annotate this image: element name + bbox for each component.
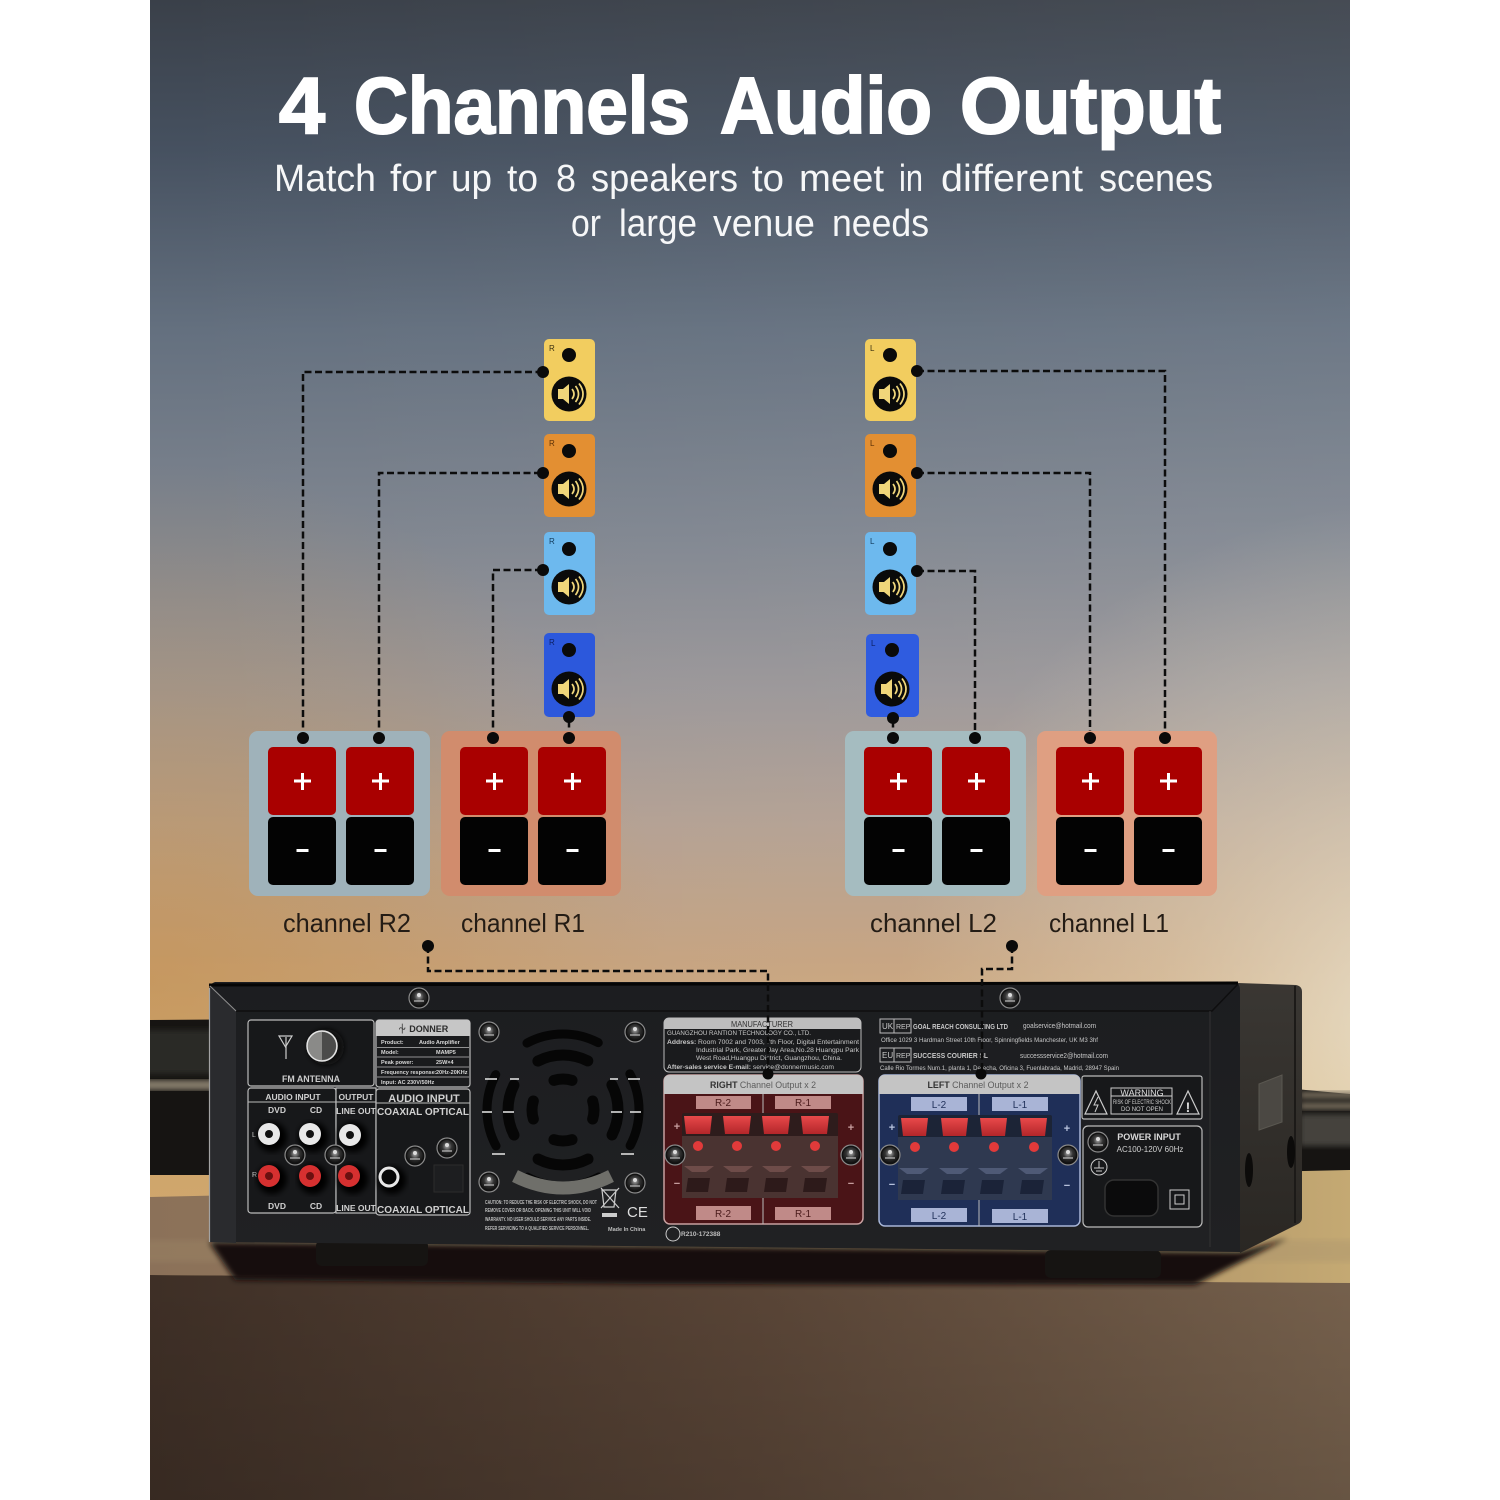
manufacturer label: After-sales service E-mail: service@donnermusic.com [667,1064,834,1071]
audio input panel [248,1088,377,1213]
title [279,61,1221,150]
channel labels: channel L1 [1049,908,1169,938]
dashed link from channel labels to amplifier [422,940,1018,1080]
subtitle: meet [799,158,884,200]
Donner spec label: Audio Amplifier [419,1040,461,1046]
right channel output panel [664,1075,863,1224]
manufacturer label: Address: Room 7002 and 7003, 7th Floor, Digital Entertainment [667,1039,859,1046]
UK and EU rep info: successservice2@hotmail.com [1020,1053,1108,1060]
speaker L blue: L [871,639,876,648]
left channel output panel [879,1075,1080,1226]
right channel output panel: RIGHT Channel Output x 2 [710,1080,816,1091]
caution text and certification marks: CE [627,1204,648,1221]
connection dots [297,732,1171,744]
audio input panel: CD [310,1105,322,1115]
UK and EU rep info: SUCCESS COURIER SL [913,1053,989,1060]
caution text and certification marks: CAUTION: TO REDUCE THE RISK OF ELECTRIC SHOCK, DO NOT [485,1200,597,1206]
speaker L orange: L [870,439,875,448]
subtitle: 8 [556,158,576,200]
coaxial optical panel [376,1089,470,1216]
subtitle: scenes [1099,158,1213,200]
amplifier rear panel [209,982,1302,1278]
FM antenna box: FM ANTENNA [282,1074,340,1084]
subtitle: in [899,158,923,200]
panel: channel L2 terminals [845,731,1026,896]
right channel output panel: R-2 [715,1098,731,1109]
speaker L orange [865,434,923,517]
manufacturer label: Industrial Park, Greater Jay Area,No.28 Huangpu Park [696,1047,860,1054]
Donner spec label: 20Hz-20KHz [436,1070,468,1076]
channel labels [283,908,1169,938]
left channel output panel: L-2 [932,1100,947,1111]
left channel output panel: L-1 [1013,1100,1028,1111]
audio input panel: L [252,1132,256,1139]
warning box [1082,1076,1202,1119]
channel labels: channel R2 [283,908,411,938]
right channel output panel: R-1 [795,1098,811,1109]
feet [316,1240,1161,1278]
speaker R light blue [537,532,595,615]
manufacturer label: MANUFACTURER [731,1020,793,1029]
coaxial optical panel: AUDIO INPUT [388,1093,460,1105]
speaker R yellow: R [549,344,555,353]
warning box: DO NOT OPEN [1121,1107,1163,1113]
FM antenna box [248,1020,374,1086]
panel: channel R2 terminals [249,731,430,896]
manufacturer label [664,1018,861,1072]
speaker L blue [866,634,919,724]
audio input panel: DVD [268,1201,286,1211]
subtitle: Match [274,158,376,200]
manufacturer label: West Road,Huangpu District, Guangzhou, China. [696,1055,842,1062]
audio input panel: AUDIO INPUT [265,1092,321,1102]
power input box: POWER INPUT [1117,1132,1181,1142]
caution text and certification marks: Made In China [608,1227,646,1233]
right channel output panel: − [848,1178,854,1190]
right channel output panel: + [674,1121,680,1133]
subtitle: up [451,158,492,200]
right channel output panel: − [674,1178,680,1190]
subtitle: to [752,158,784,200]
Donner spec label: MAMP5 [436,1050,456,1056]
right channel output panel: R-1 [795,1209,811,1220]
UK and EU rep info: GOAL REACH CONSULTING LTD [913,1024,1008,1031]
speaker L yellow [865,339,923,421]
left channel output panel: L-1 [1013,1212,1028,1223]
subtitle: large [619,203,697,245]
subtitle: for [390,158,437,200]
audio input panel: LINE OUT [336,1106,377,1116]
right channel output panel: + [848,1122,854,1134]
UK and EU rep info: Calle Rio Tormes Num.1, planta 1, Derecha, Oficina 3, Fuenlabrada, Madrid, 28947 Spain [880,1066,1119,1072]
speaker L yellow: L [870,344,875,353]
Donner spec label [376,1020,470,1087]
Donner spec label: Peak power: [381,1060,414,1066]
UK and EU rep info: Office 1029 3 Hardman Street 10th Floor, Spinningfields Manchester, UK M3 3hf [881,1038,1098,1044]
subtitle: needs [832,203,929,245]
channel labels: channel R1 [461,908,585,938]
Donner spec label: 25W×4 [436,1060,455,1066]
audio input panel: R [252,1172,257,1179]
UK and EU rep info: REP [896,1024,911,1031]
warning box: ! [1186,1099,1190,1115]
UK and EU rep info: goalservice@hotmail.com [1023,1023,1096,1030]
Donner spec label: Frequency response: [381,1070,437,1076]
speaker R yellow [537,339,595,421]
UK and EU rep info: EU [882,1051,893,1060]
speaker L light blue: L [870,537,875,546]
power input box [1083,1126,1202,1227]
audio input panel: LINE OUT [336,1203,377,1213]
caution text and certification marks: R210-172388 [681,1231,721,1238]
caution text and certification marks: WARRANTY. NO USER SHOULD SERVICE ANY PARTS INSIDE. [485,1217,591,1223]
subtitle: venue [713,203,815,245]
amplifier body [209,982,1302,1253]
cooling fan grille [479,1022,645,1193]
subtitle [274,158,1213,245]
title: Audio [720,61,932,150]
warning box: WARNING [1120,1088,1164,1098]
left channel output panel: LEFT Channel Output x 2 [928,1080,1028,1091]
speaker R light blue: R [549,537,555,546]
speaker R orange: R [549,439,555,448]
RCA jacks [257,1122,368,1194]
audio input panel: OUTPUT [339,1092,374,1102]
left channel output panel: + [1064,1123,1070,1135]
speaker R orange [537,434,595,517]
warning box: RISK OF ELECTRIC SHOCK [1113,1100,1171,1106]
UK and EU rep info [880,1019,1119,1072]
top screws [409,988,1020,1008]
audio input panel: CD [310,1201,322,1211]
left channel output panel: L-2 [932,1211,947,1222]
speaker L light blue [865,532,923,615]
right channel output panel: R-2 [715,1209,731,1220]
coaxial optical panel: COAXIAL OPTICAL [377,1107,469,1118]
title: Channels [354,61,690,150]
Donner spec label: ⏆ DONNER [398,1023,449,1034]
speaker R blue [544,633,595,723]
power input box: AC100-120V 60Hz [1117,1145,1183,1154]
audio input panel: DVD [268,1105,286,1115]
subtitle: to [507,158,538,200]
caution text and certification marks [485,1188,721,1241]
channel labels: channel L2 [870,908,997,938]
Donner spec label: Model: [381,1050,399,1056]
caution text and certification marks: REFER SERVICING TO A QUALIFIED SERVICE PERSONNEL. [485,1226,589,1232]
Donner spec label: Input: AC 230V/50Hz [381,1080,435,1086]
speaker R blue: R [549,638,555,647]
subtitle: speakers [591,158,738,200]
UK and EU rep info: REP [896,1053,911,1060]
coaxial optical panel: COAXIAL OPTICAL [377,1205,469,1216]
left channel output panel: + [889,1122,895,1134]
subtitle: different [941,158,1083,200]
subtitle: or [571,203,601,245]
left channel output panel: − [1064,1180,1070,1192]
panel: channel L1 terminals [1037,731,1217,896]
Donner spec label: Product: [381,1040,404,1046]
left channel output panel: − [889,1179,895,1191]
title: Output [960,61,1221,150]
caution text and certification marks: REMOVE COVER OR BACK. OPENING THIS UNIT WILL VOID [485,1208,591,1214]
speaker wiring diagram: dashed connections [303,371,1165,738]
title: 4 [279,61,326,150]
panel: channel R1 terminals [441,731,621,896]
manufacturer label: GUANGZHOU RANTION TECHNOLOGY CO., LTD. [667,1030,811,1037]
UK and EU rep info: UK [882,1022,894,1031]
